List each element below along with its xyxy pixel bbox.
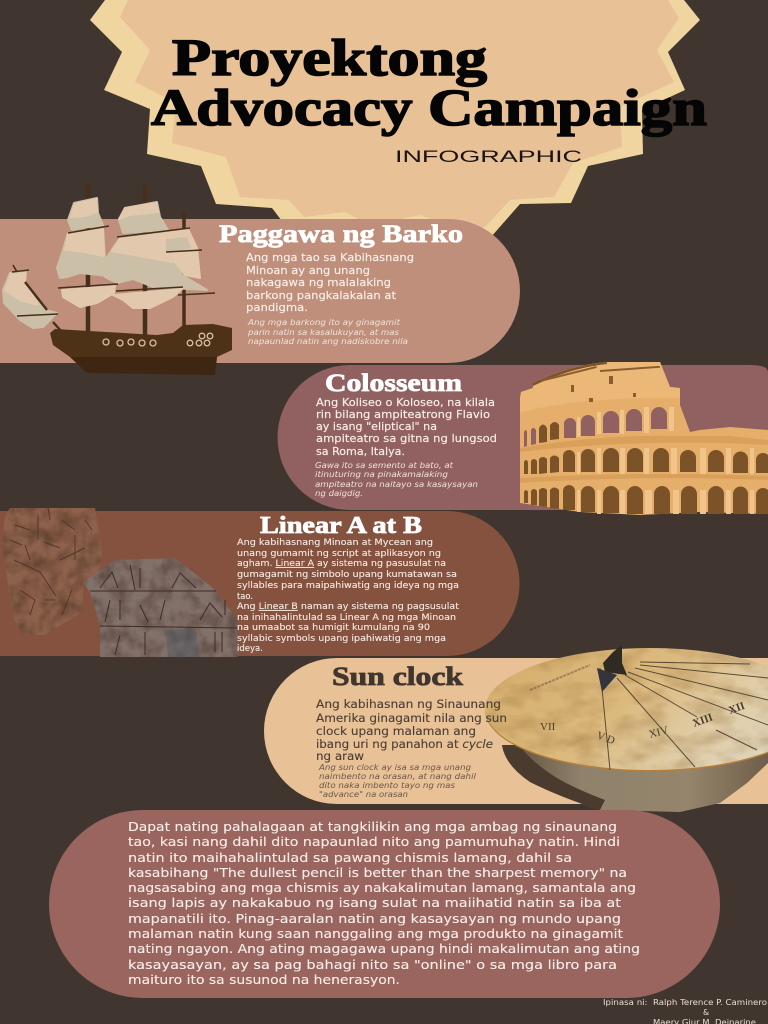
text block: Colosseum body	[316, 397, 497, 458]
heading: Linear A at B: Linear A at B	[260, 513, 422, 539]
text block: Linear body: syllabic symbols upang ipahiwatig ang mga	[237, 634, 446, 644]
text block: Sun clock body: Amerika ginagamit nila ang sun	[316, 711, 507, 725]
text block: Linear body: agham. Linear A ay sistema ng pasusulat na	[237, 559, 446, 569]
text block: Colosseum note	[315, 461, 478, 498]
panel: Linear A at B	[0, 508, 520, 657]
text block: Colosseum body: sa Roma, Italya.	[316, 446, 405, 458]
text block: conclusion	[128, 819, 640, 987]
text block: Sun clock note: naimbento na orasan, at nang dahil	[319, 772, 477, 781]
text block: Sun clock note: "advance" na orasan	[319, 790, 408, 799]
title: Proyektong	[172, 30, 487, 87]
text block: ship body: Ang mga tao sa Kabihasnang	[246, 251, 414, 264]
text block: ship body: pandigma.	[246, 301, 308, 314]
heading: Sun clock: Sun clock	[332, 662, 464, 691]
text block: ship note: napaunlad natin ang nadiskobre nila	[248, 337, 408, 346]
icon: stone sundial: VII	[540, 721, 556, 733]
text block: Sun clock note: Ang sun clock ay isa sa mga unang	[318, 763, 471, 772]
text block: Sun clock body: Ang kabihasnan ng Sinaunang	[316, 697, 501, 711]
credits	[603, 998, 767, 1024]
text block: conclusion: kasabihang "The dullest pencil is better than the sharpest memory" na	[128, 865, 627, 880]
icon: stone sundial: XIV	[648, 724, 670, 741]
text block: Linear body: syllables para maipahiwatig ang ideya ng mga	[237, 581, 459, 591]
text block: conclusion: malaman natin kung saan nanggaling ang mga produkto na ginagamit	[128, 926, 623, 941]
text block: Linear body: Ang kabihasnang Minoan at Mycean ang	[237, 538, 433, 548]
text block: Linear body: na umaabot sa humigit kumulang na 90	[237, 623, 430, 633]
credits: Ipinasa ni: Ralph Terence P. Caminero	[603, 998, 767, 1007]
icon: clay tablets	[2, 508, 238, 657]
text block: Linear body	[237, 538, 460, 654]
panel: Paggawa ng Barko	[0, 219, 520, 363]
text block: Colosseum body: ampiteatro sa gitna ng lungsod	[316, 433, 497, 445]
text block: Colosseum note: ampiteatro na naitayo sa kasaysayan	[315, 480, 478, 489]
text block: Sun clock body: ibang uri ng panahon at cycle	[316, 737, 493, 751]
panel: Colosseum	[278, 365, 768, 510]
title	[151, 30, 707, 137]
text block: Colosseum body: ay isang "eliptical" na	[316, 421, 437, 433]
text block: Sun clock note	[318, 763, 477, 799]
subtitle: INFOGRAPHIC	[395, 147, 582, 166]
text block: ship body	[246, 251, 414, 314]
text block: Linear body: ideya.	[237, 644, 263, 654]
heading: Paggawa ng Barko: Paggawa ng Barko	[219, 221, 463, 248]
text block: Colosseum note: ng daigdig.	[315, 489, 363, 498]
credits: &	[703, 1008, 709, 1017]
text block: ship note: Ang mga barkong ito ay ginagamit	[247, 318, 401, 327]
text block: Sun clock body: clock upang malaman ang	[316, 724, 476, 738]
text block: Colosseum body: rin bilang ampiteatrong Flavio	[316, 409, 490, 421]
text block: conclusion: mapanatili ito. Pinag-aaralan natin ang kasaysayan ng mundo upang	[128, 911, 621, 926]
panel: conclusion	[49, 810, 720, 998]
text block: Colosseum note: Gawa ito sa semento at bato, at	[315, 461, 454, 470]
text block: Linear body: tao.	[237, 592, 253, 602]
icon: stone sundial: XIII	[691, 711, 715, 730]
panel: Sun clock	[264, 645, 768, 812]
icon: sailing ship	[3, 183, 232, 375]
heading: Colosseum: Colosseum	[325, 370, 462, 397]
text block: ship note	[247, 318, 408, 346]
text block: conclusion: tao, kasi nang dahil dito napaunlad nito ang pamumuhay natin. Hindi	[128, 834, 620, 849]
text block: ship note: parin natin sa kasalukuyan, at mas	[247, 328, 399, 337]
text block: conclusion: isang lapis ay nakakabuo ng isang sulat na maiihatid natin sa iba at	[128, 895, 621, 910]
text block: ship body: barkong pangkalakalan at	[246, 289, 396, 302]
text block: conclusion: nagsasabing ang mga chismis ay nakakalimutan lamang, samantala ang	[128, 880, 636, 895]
text block: conclusion: Dapat nating pahalagaan at tangkilikin ang mga ambag ng sinaunang	[128, 819, 617, 834]
text block: Colosseum note: itinuturing na pinakamalaking	[315, 470, 448, 479]
text block: conclusion: natin ito maihahalintulad sa pawang chismis lamang, dahil sa	[128, 850, 572, 865]
text block: conclusion: nating ngayon. Ang ating magagawa upang hindi makalimutan ang ating	[128, 941, 640, 956]
icon: Colosseum building	[520, 362, 768, 515]
text block: ship body: nakagawa ng malalaking	[246, 276, 391, 289]
icon: stone sundial	[485, 645, 768, 812]
title: Advocacy Campaign	[151, 80, 707, 137]
text block: ship body: Minoan ay ang unang	[246, 264, 370, 277]
text block: Colosseum body: Ang Koliseo o Koloseo, na kilala	[316, 397, 495, 409]
text block: Sun clock body: ng araw	[316, 749, 364, 763]
text block: conclusion: kasayasayan, ay sa pag bahagi nito sa "online" o sa mga libro para	[128, 957, 617, 972]
text block: conclusion: maituro ito sa susunod na henerasyon.	[128, 972, 400, 987]
icon: stone sundial: V D	[595, 730, 616, 747]
text block: Sun clock body	[316, 697, 507, 763]
title starburst shape	[90, 0, 700, 240]
text block: Linear body: gumagamit ng simbolo upang kumatawan sa	[237, 570, 457, 580]
text block: Linear body: na inihahalintulad sa Linear A ng mga Minoan	[237, 613, 456, 623]
text block: Sun clock note: dito naka imbento tayo ng mas	[319, 781, 455, 790]
text block: Linear body: Ang Linear B naman ay sistema ng pagsusulat	[237, 602, 460, 612]
text block: Linear body: unang gumamit ng script at aplikasyon ng	[237, 549, 441, 559]
icon: stone sundial: XII	[727, 700, 747, 717]
